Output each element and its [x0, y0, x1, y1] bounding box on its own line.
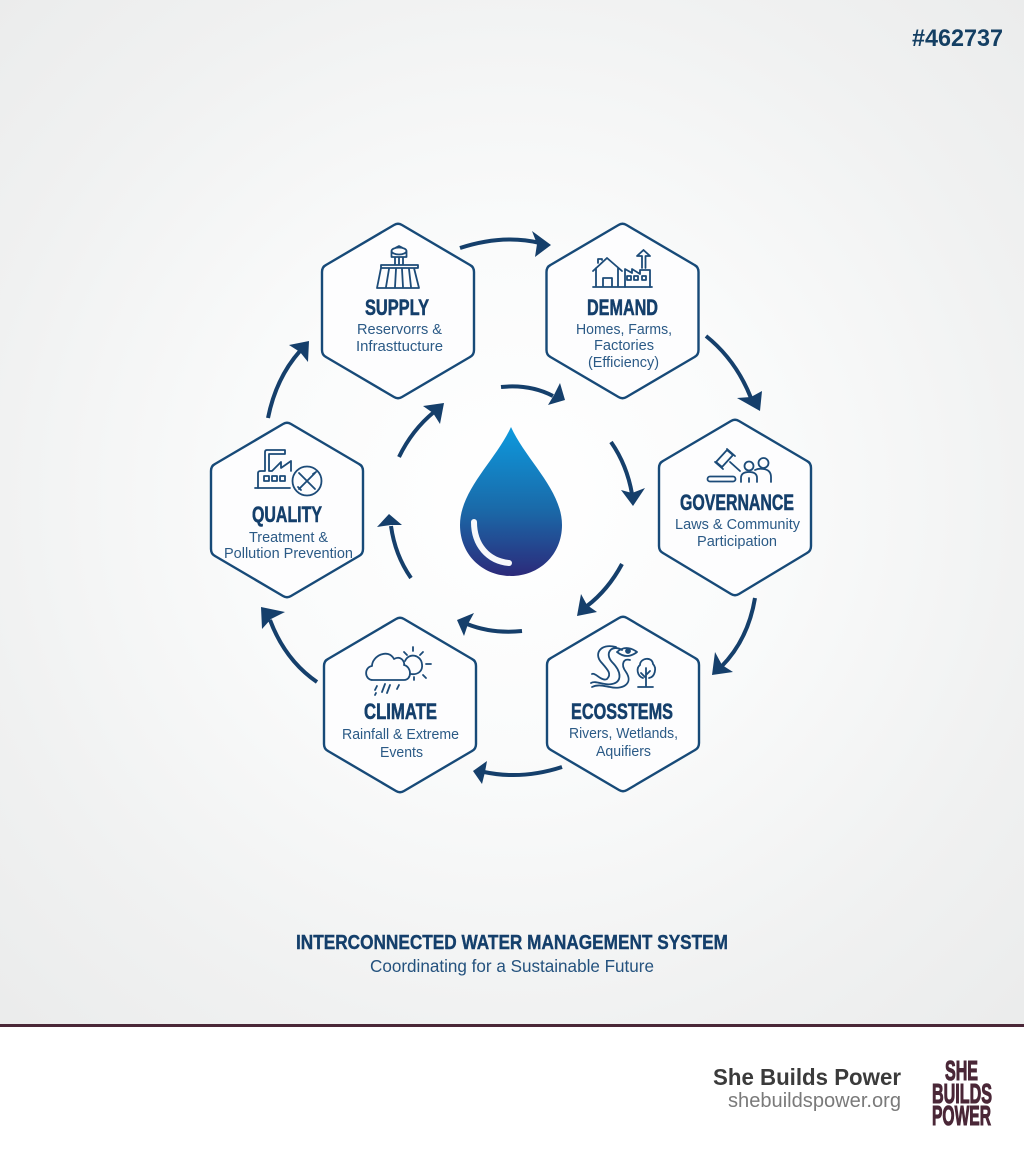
panel: ecosystems: [547, 617, 699, 791]
text: demand description: (Efficiency): [588, 354, 659, 371]
panel: quality: [211, 423, 363, 597]
text: supply description: Reservorrs &: [357, 321, 442, 338]
logo: SHE: [945, 1055, 978, 1086]
icon: water tower and reservoir: [377, 246, 419, 288]
icon: factory and no pollution: [255, 450, 322, 496]
text: demand description: Factories: [594, 337, 654, 354]
text: demand description: Homes, Farms,: [576, 321, 672, 338]
text: ecosystems description: Aquifiers: [596, 743, 651, 760]
footer panel: [0, 1024, 1024, 1154]
panel: supply: [322, 224, 474, 398]
icon: gavel and community: [708, 449, 771, 482]
heading: governance: GOVERNANCE: [680, 490, 794, 515]
panel: climate: [324, 618, 476, 792]
text: quality description: Pollution Prevention: [224, 545, 353, 562]
text: quality description: [224, 529, 353, 562]
subtitle: Coordinating for a Sustainable Future: [370, 956, 654, 976]
text: ecosystems description: [569, 725, 678, 760]
panel: demand: [546, 224, 698, 398]
panel: governance: [659, 420, 811, 595]
icon: river, eye and tree: [591, 646, 655, 688]
text: climate description: Events: [380, 744, 423, 761]
brand url: shebuildspower.org: [728, 1090, 901, 1112]
icon: house and factory: [593, 250, 652, 287]
text: quality description: Treatment &: [249, 529, 328, 546]
text: governance description: Participation: [697, 533, 777, 550]
text: governance description: [675, 516, 800, 550]
central water drop: [460, 427, 562, 576]
code label: #462737: [912, 25, 1003, 52]
heading: supply: SUPPLY: [365, 295, 429, 320]
text: supply description: Infrasttucture: [356, 338, 443, 355]
text: supply description: [356, 321, 443, 355]
inner cycle arrows: [377, 383, 645, 636]
heading: ecosystems: ECOSSTEMS: [571, 699, 673, 724]
text: climate description: [342, 726, 459, 761]
heading: quality: QUALITY: [252, 502, 322, 527]
text: climate description: Rainfall & Extreme: [342, 726, 459, 743]
icon: cloud, sun and rain: [366, 647, 431, 695]
heading: climate: CLIMATE: [364, 699, 437, 724]
text: ecosystems description: Rivers, Wetlands,: [569, 725, 678, 742]
title: INTERCONNECTED WATER MANAGEMENT SYSTEM: [296, 931, 728, 954]
text: governance description: Laws & Community: [675, 516, 800, 533]
text: demand description: [576, 321, 672, 371]
outer cycle arrows: [261, 231, 762, 784]
brand name: She Builds Power: [713, 1064, 901, 1090]
heading: demand: DEMAND: [587, 295, 658, 320]
logo: [932, 1055, 992, 1131]
